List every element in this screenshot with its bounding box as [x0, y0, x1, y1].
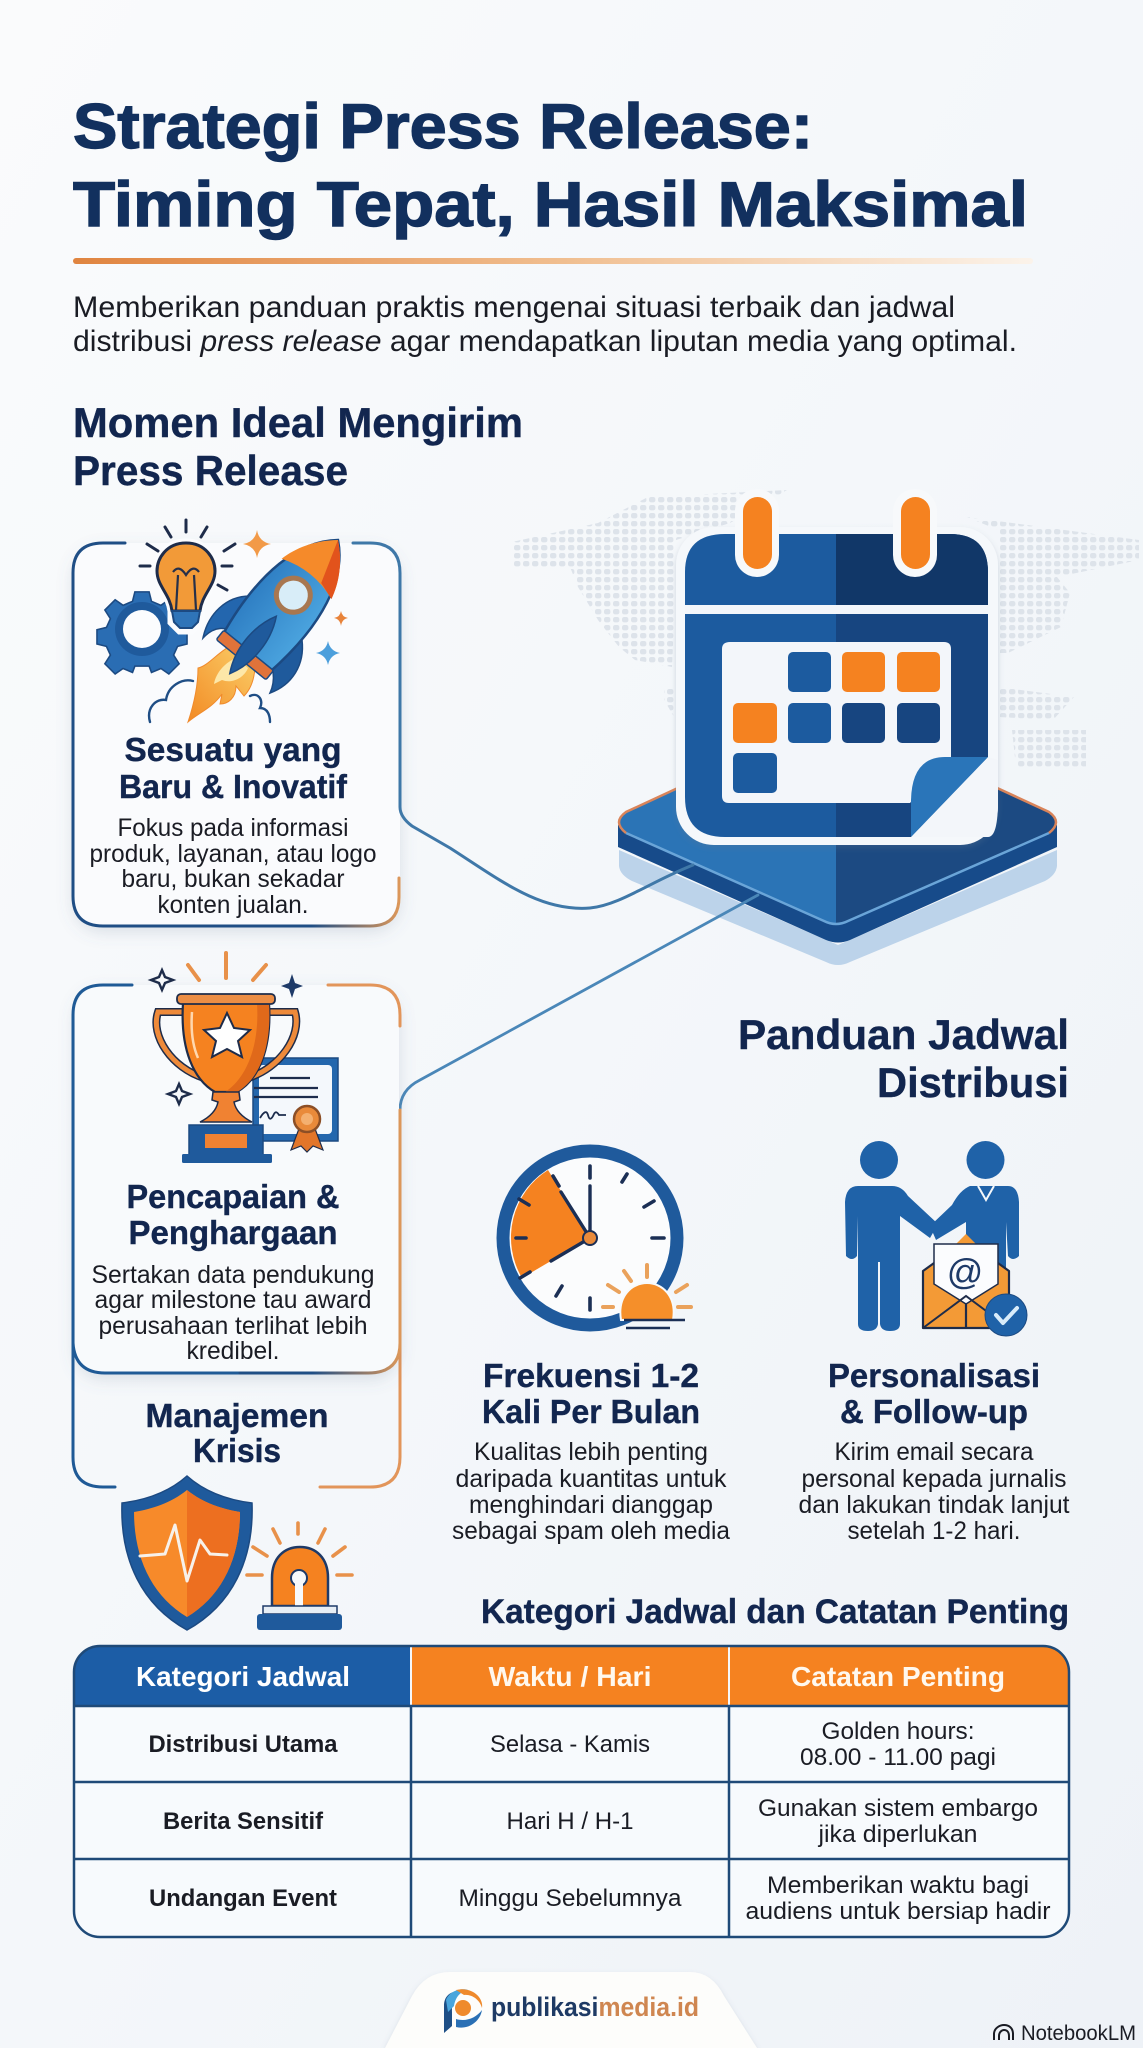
- block: personalisasi: dan lakukan tindak lanjut: [798, 1491, 1070, 1519]
- card title: Penghargaan: [128, 1214, 338, 1251]
- subtitle: Memberikan panduan praktis mengenai situasi terbaik dan jadwal: [73, 291, 955, 324]
- heading: Manajemen: [146, 1397, 328, 1434]
- card description: konten jualan.: [158, 891, 308, 919]
- icon: sparkles: [243, 530, 348, 665]
- section heading: panduan jadwal: [738, 1011, 1069, 1106]
- footer logo tab: [385, 1972, 757, 2048]
- panel border: [73, 985, 400, 1373]
- icon: handshake people and email: [845, 1141, 1027, 1336]
- brand name: publikasimedia.id: [491, 1992, 699, 2022]
- section heading: momen ideal: Press Release: [73, 447, 348, 494]
- table header: Waktu / Hari: [488, 1661, 652, 1692]
- person right: [930, 1141, 1019, 1290]
- table row: berita sensitif: Hari H / H-1: [506, 1808, 634, 1835]
- calendar rings: [735, 489, 937, 577]
- title: Strategi Press Release:: [73, 92, 813, 162]
- card description: produk, layanan, atau logo: [90, 840, 376, 868]
- table header: Kategori Jadwal: [136, 1661, 350, 1692]
- icon: light bulb: [140, 520, 235, 630]
- card description: kredibel.: [186, 1337, 280, 1365]
- table row: undangan event: Undangan Event: [149, 1885, 337, 1912]
- block: frekuensi: Kualitas lebih penting: [474, 1438, 708, 1466]
- card title: Pencapaian &: [126, 1178, 340, 1215]
- icon: certificate: [253, 1058, 338, 1152]
- envelope: [923, 1234, 1009, 1328]
- card description: agar milestone tau award: [94, 1286, 372, 1314]
- card description: perusahaan terlihat lebih: [98, 1312, 368, 1340]
- table: [74, 1646, 1069, 1937]
- calendar page: [722, 642, 951, 803]
- block: frekuensi: daripada kuantitas untuk: [456, 1465, 727, 1493]
- block: personalisasi: & Follow-up: [840, 1393, 1028, 1430]
- notebooklm mark: NotebookLM: [1021, 2022, 1136, 2045]
- card title: Sesuatu yang: [124, 731, 342, 768]
- table row: distribusi utama: Distribusi Utama: [148, 1731, 338, 1758]
- block: frekuensi: sebagai spam oleh media: [452, 1517, 730, 1545]
- table row: berita sensitif: [163, 1795, 1038, 1848]
- panel: baru dan inovatif: [73, 518, 693, 926]
- icon: publikasi logo: [444, 1989, 482, 2033]
- table row: undangan event: Memberikan waktu bagi: [767, 1872, 1029, 1899]
- table header: [74, 1646, 1069, 1706]
- table row: berita sensitif: Gunakan sistem embargo: [758, 1795, 1038, 1822]
- block: frekuensi: [452, 1357, 730, 1545]
- card description: baru, bukan sekadar: [122, 865, 344, 893]
- section heading: panduan jadwal: Panduan Jadwal: [738, 1011, 1069, 1058]
- cloud: [149, 680, 270, 722]
- flame: [188, 645, 255, 722]
- table row: distribusi utama: Golden hours:: [822, 1718, 974, 1745]
- table row: distribusi utama: 08.00 - 11.00 pagi: [800, 1744, 996, 1771]
- world map dots: [512, 490, 1139, 767]
- icon: trophy: [156, 994, 296, 1163]
- section heading: panduan jadwal: Distribusi: [877, 1059, 1069, 1106]
- icon: clock: [503, 1151, 691, 1328]
- section heading: momen ideal: [73, 399, 523, 494]
- section heading: momen ideal: Momen Ideal Mengirim: [73, 399, 523, 446]
- table heading: Kategori Jadwal dan Catatan Penting: [481, 1593, 1069, 1631]
- icon: rocket: [149, 518, 365, 722]
- icon: alarm siren: [247, 1523, 352, 1630]
- block: personalisasi: personal kepada jurnalis: [802, 1465, 1066, 1493]
- table row: undangan event: Minggu Sebelumnya: [458, 1885, 682, 1912]
- envelope: @: [947, 1251, 983, 1292]
- title: [73, 92, 1028, 240]
- heading: [146, 1397, 328, 1469]
- icon: shield: [122, 1476, 252, 1630]
- calendar fold: [911, 757, 998, 837]
- calendar body: [685, 534, 836, 837]
- subtitle: distribusi press release agar mendapatkan liputan media yang optimal.: [73, 325, 1017, 358]
- table row: berita sensitif: Berita Sensitif: [163, 1808, 324, 1835]
- table header: Catatan Penting: [791, 1661, 1005, 1692]
- block: frekuensi: menghindari dianggap: [469, 1491, 713, 1519]
- platform: [618, 715, 1057, 965]
- table row: berita sensitif: jika diperlukan: [817, 1821, 978, 1848]
- card title: Baru & Inovatif: [119, 768, 348, 805]
- block: personalisasi: Personalisasi: [828, 1357, 1040, 1394]
- connector: panel 2 to platform: [400, 895, 758, 1110]
- check badge: [985, 1294, 1027, 1336]
- panel: pencapaian dan penghargaan: [73, 953, 400, 1373]
- card description: [90, 814, 376, 919]
- block: frekuensi: Frekuensi 1-2: [483, 1357, 699, 1394]
- card description: [92, 1261, 374, 1365]
- panel border: [73, 543, 693, 926]
- card title: [126, 1178, 340, 1251]
- card title: [119, 731, 348, 805]
- heading: Krisis: [193, 1432, 281, 1469]
- icon: trophy sparkles: [151, 953, 303, 1104]
- calendar stripe: [685, 605, 988, 614]
- table row: distribusi utama: [148, 1718, 996, 1771]
- table grid: [74, 1706, 1069, 1937]
- fins: [203, 596, 250, 638]
- subtitle: [73, 291, 1017, 358]
- title rule: [73, 258, 1033, 264]
- icon: gear: [97, 592, 187, 674]
- card description: Fokus pada informasi: [118, 814, 348, 842]
- block: personalisasi: Kirim email secara: [834, 1438, 1034, 1466]
- person left: [845, 1141, 938, 1331]
- table row: undangan event: [149, 1872, 1050, 1925]
- card description: Sertakan data pendukung: [92, 1261, 374, 1289]
- title: Timing Tepat, Hasil Maksimal: [73, 170, 1028, 240]
- block: personalisasi: setelah 1-2 hari.: [848, 1517, 1020, 1545]
- icon: sun: [603, 1265, 691, 1328]
- block: personalisasi: [798, 1357, 1070, 1545]
- panel: manajemen krisis frame: [73, 1340, 400, 1487]
- block: frekuensi: Kali Per Bulan: [482, 1393, 700, 1430]
- calendar cells: [733, 652, 940, 793]
- table row: undangan event: audiens untuk bersiap hadir: [746, 1898, 1050, 1925]
- calendar icon: [676, 489, 998, 845]
- table row: distribusi utama: Selasa - Kamis: [490, 1731, 650, 1758]
